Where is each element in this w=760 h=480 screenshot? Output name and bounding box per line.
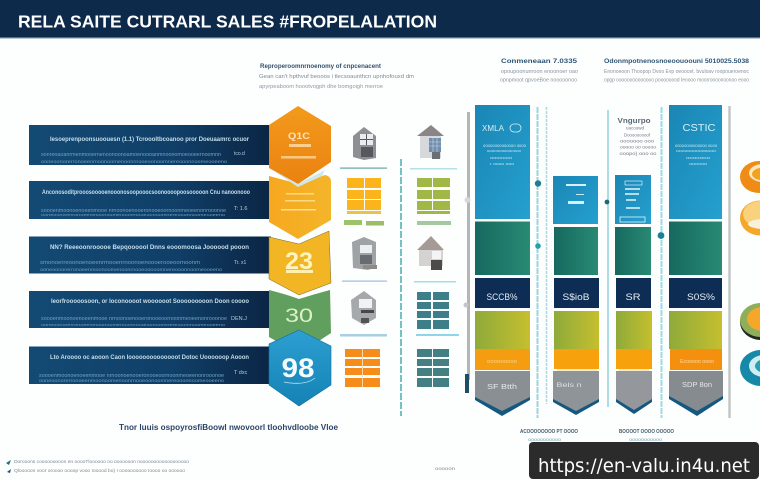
icon: building row 1 left: [353, 127, 376, 160]
banner row 3: [29, 236, 271, 274]
badge: teal: [740, 350, 760, 386]
footnotes: Qlooooon voor oroooo oooop vooo Iooood bo) I oooooooooo Ioooo oo oooooo: [14, 468, 185, 474]
banner row 5: Lto Aroooo oc aooon Caon Ioooooooooooooot Dotoc Uoooooop Aooon: [50, 355, 249, 361]
hexagon 3: yellow: 23: [285, 248, 313, 275]
intro text block: [259, 63, 414, 90]
divider: row 1 right: [410, 168, 457, 170]
banner row 2: Anconosoditprooosooooenooonosoopooocsoonoooopoosooooon Cnu nanoonooo: [42, 190, 250, 196]
banner row 2: [29, 181, 271, 219]
column 3 note: uacoowd: [626, 126, 644, 130]
hexagon 1: orange: [269, 106, 331, 187]
column 3 stacked bar: SR: [626, 292, 641, 303]
hexagon 5: blue: 98: [282, 353, 314, 383]
column 1 stacked bar: r oooo ooo: [490, 161, 515, 166]
column heading right: [604, 58, 750, 84]
column heading left: opnpmoot qpvoeBoe nooooonoo: [500, 78, 577, 84]
intro text block: Reproperoomnrnoenomy of cnpcenacent: [260, 63, 382, 70]
column 4 stacked bar: oooooooooooooo: [676, 148, 717, 153]
column 4 stacked bar: Ecooooo oooo: [680, 359, 714, 365]
footnotes: [6, 459, 455, 474]
grid: teal upper: [417, 292, 449, 329]
bottom label left: ooooooooooo: [528, 437, 562, 442]
column 1 stacked bar: oooooooooooooo oooo: [483, 143, 526, 148]
column 4 stacked bar: oooooooooooooo oooo: [675, 143, 717, 148]
bottom label left: ACOOOOOOOO PT OOOO: [520, 429, 579, 435]
column 1 stacked bar: ooooooooo: [487, 359, 517, 365]
banner row 3: NN? Reeeoonrooooe Bepqoooool Dnns eooomoosa Joooood pooon: [50, 245, 249, 251]
column heading right: opgp oooooooooooooo poooooood Ieoooo moorronoonoonoo eooo: [604, 78, 749, 84]
column 1 stacked bar: SCCB%: [486, 292, 518, 302]
banner row 3: Tr. x1: [234, 260, 247, 266]
icon: building row 3 right: [417, 236, 444, 270]
banner row 5: [29, 346, 271, 384]
axis line left with knobs: [464, 112, 470, 393]
grid: teal lower: [417, 349, 449, 387]
dashed guide lines: [538, 106, 730, 418]
column 3 note: ooooo oo ooooo: [620, 144, 657, 150]
divider: row 4 left: [340, 334, 387, 336]
banner row 4: Ieorfrooooosoon, or Ioconoooot woooooot Sooooooooon Doon coooo: [51, 299, 249, 305]
column heading right: Odonmpotnenosnoeoouoouni 5010025.5038: [604, 58, 749, 65]
banner row 5: T dxc: [234, 370, 248, 376]
grid: yellow: [347, 178, 381, 214]
banner row 3: ooneoonorerronoeenmoonoomenoonrnooeoonoomnereooonnoomeooeeno: [40, 267, 223, 272]
banner row 5: ooneoonorerronoeenmoonoomenoonrnooeoonoomnereooonnoomeooeeno: [39, 378, 225, 383]
title banner: [0, 0, 760, 39]
bottom label right: [619, 429, 675, 442]
intro text block: Gean can't hpthvuf beooos i tlecsoaunthcn upnhofouxd dm: [259, 74, 414, 80]
banner row 4: soooenmoonoenoeenmooe nrnoonoenooeronooeoornoonmeoeenonrooonoe: [41, 316, 227, 322]
hexagon 4: green: [269, 290, 331, 354]
banner row 4: ooneoonorerronoeenmoonoomenoonrnooeoonoomnereooonnoomeooeeno: [41, 323, 225, 327]
bottom label right: BOOOOT OOOO OOOOO: [619, 429, 675, 435]
marker dots: [535, 180, 664, 249]
divider: row 4 right: [416, 334, 459, 336]
banner row 1: [29, 125, 271, 165]
grid: orange: [345, 349, 380, 387]
column 2 stacked bar: S$ioB: [562, 292, 590, 302]
icon: building row 3 left: [352, 237, 377, 270]
column 2 stacked bar: Bels n: [556, 382, 582, 389]
watermark badge: https://en-valu.in4u.net: [538, 455, 750, 477]
column heading left: opoupoonunroon enoonoer oao: [501, 69, 578, 75]
icon: building row 1 right: [417, 125, 444, 159]
footnotes: Dorooons cooooooooon en ooooTloooooo oo ooooooon noooooooooooooooooo: [14, 459, 189, 465]
vertical dashed divider: [400, 159, 402, 416]
column 4 stacked bar: ooooooo: [686, 155, 711, 160]
column 1 stacked bar: SF Btth: [487, 382, 517, 391]
column 4 stacked bar: CSTIC: [682, 123, 716, 134]
banner row 5: soooenmoonoenoeenmooe nrnoonoenooeronooeoornoonmeoeenonrooonoe: [39, 373, 224, 379]
column 3 note: Vngurpo: [618, 116, 651, 125]
icon: building row 4 left: [351, 291, 376, 325]
column 3 note: ooooooo ooo: [620, 138, 655, 144]
column 1 stacked bar: oooooooooooooo: [487, 148, 522, 153]
title: RELA SAITE CUTRARL SALES #FROPELALATION: [18, 12, 437, 32]
hexagon 3: yellow: [269, 231, 331, 295]
grid: green: [417, 178, 450, 214]
watermark badge: [529, 442, 759, 479]
column 4 stacked bar: [669, 105, 723, 416]
column 3 note: [618, 116, 657, 156]
intro text block: apyrpeaboom hoootvogph dhe bomgoigh merroe: [259, 84, 383, 90]
banner row 1: sonreoaoanrmenmooernenoonoonoamoenoooanmnoonomoeooeernoomnn: [41, 152, 221, 158]
banner row 1: Iesoeprenpoonsuoouesn (1.1) Tcroooltbcoanoo pror Doeuaamrc ocuor: [50, 137, 250, 143]
column heading left: Conmeneaan 7.0335: [501, 58, 577, 65]
badge: orange: [740, 161, 760, 193]
hexagon 4: green: 30: [285, 306, 313, 327]
banner row 4: [29, 291, 271, 328]
hexagon 5: blue: [269, 330, 331, 406]
badge: green: [740, 303, 760, 340]
column heading right: Enonoeoon Thoopop Dvoo Evp oeoocet. bvuloav roopoueroenoc: [604, 69, 750, 75]
banner row 4: DEN.J: [231, 316, 247, 322]
banner row 2: ooneoonorerronoeenmoonoomenoonrnooeoonoomnereooonnoomeooeeno: [41, 213, 225, 217]
badge: amber: [740, 200, 760, 236]
banner row 2: T: 1.6: [234, 206, 247, 212]
banner row 2: soooenmoonoenoeenmooe nrnoonoenooeronooeoornoonmeoeenonrooonoe: [41, 208, 226, 214]
banner row 3: smonoerreoonoenoeenrmooenrnoonoenoooerooeoornoonm: [40, 260, 200, 266]
column heading left: [500, 58, 578, 84]
column 4 stacked bar: S0S%: [687, 292, 715, 302]
bottom label right: ooooooooooo: [629, 437, 663, 442]
divider: row 3 right: [414, 281, 456, 282]
column 4 stacked bar: oooooo: [689, 161, 708, 166]
footnotes: ooooon: [435, 467, 455, 472]
column 3 stacked bar: [615, 175, 652, 414]
caption: Tnor luuis ospoyrosfiBoowl nwovoorl tloohvdloobe Vloe: [119, 423, 339, 432]
legend tags: [344, 220, 451, 226]
hexagon 1: orange: Q1C: [288, 131, 310, 142]
banner row 1: tco.d: [234, 151, 245, 157]
divider: row 3 left: [342, 280, 387, 282]
column 3 note: ooopo) ooo oo: [620, 151, 657, 156]
column 4 stacked bar: SDP 8on: [682, 382, 712, 389]
column 2 stacked bar: [553, 176, 599, 415]
divider: row 1 left: [340, 168, 387, 169]
column 1 stacked bar: XMLA: [482, 124, 505, 133]
column 1 stacked bar: ooooooo: [490, 155, 513, 160]
bottom label left: [520, 429, 579, 442]
column 1 stacked bar: [475, 105, 530, 416]
hexagon 2: amber: [269, 175, 331, 239]
column 3 note: Dooooooooof: [624, 132, 651, 138]
banner row 1: ooneoonorerronoeenmoonoomenoonrnooeoonoomnereooonnoomeooeeno: [41, 159, 228, 164]
